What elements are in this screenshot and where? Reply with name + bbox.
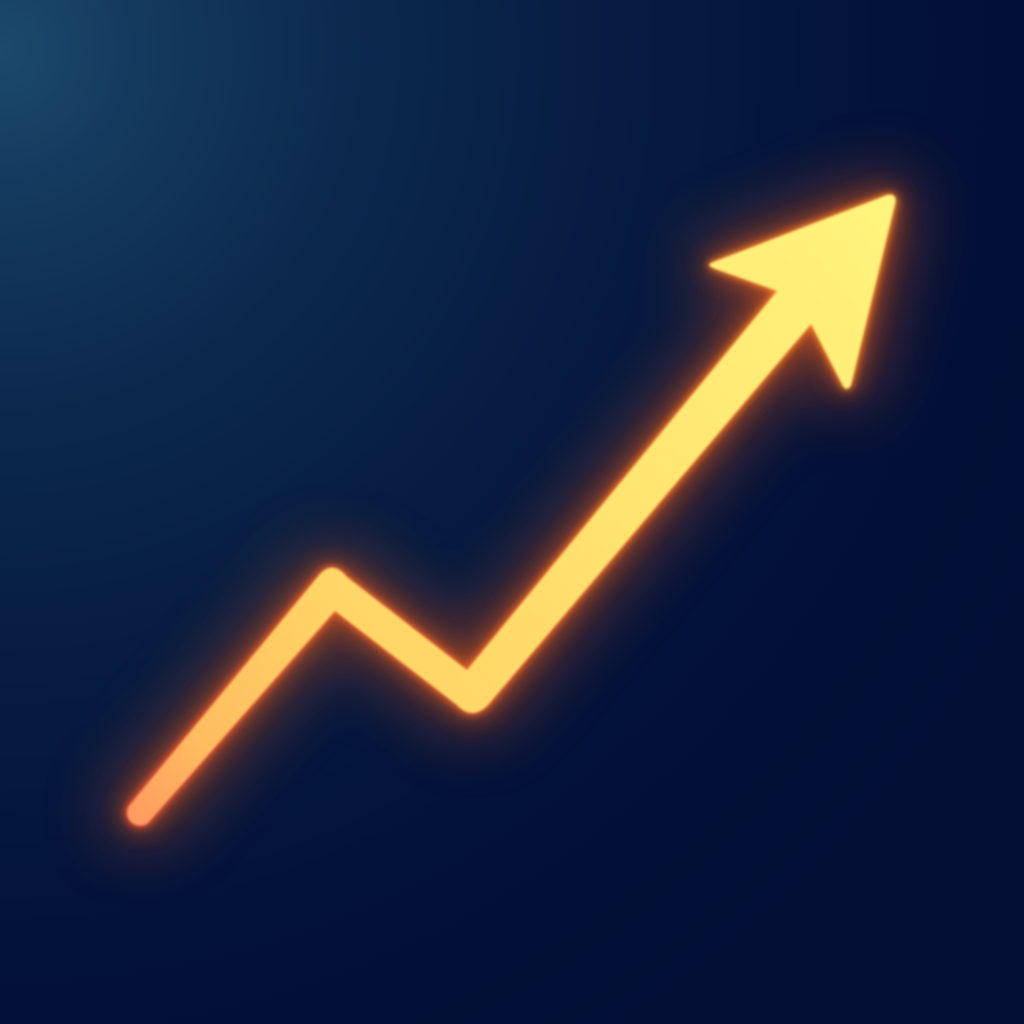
arrow: tapered shaft and head xyxy=(127,195,896,826)
arrow glow xyxy=(127,195,896,826)
